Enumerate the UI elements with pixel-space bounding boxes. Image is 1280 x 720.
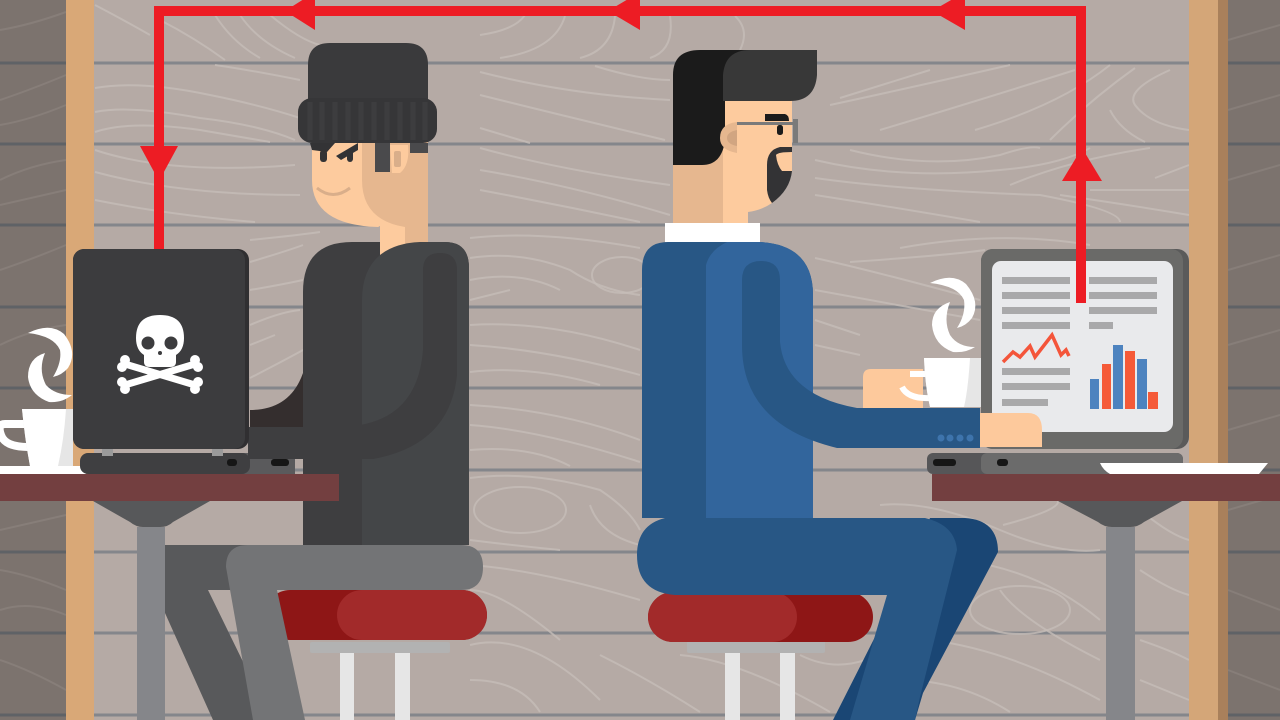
worker neck shade — [673, 150, 723, 223]
worker far leg — [833, 518, 998, 720]
hacker far leg — [165, 545, 300, 720]
hacker front torso — [362, 242, 469, 545]
left coffee cup — [0, 328, 86, 474]
worker collar — [665, 223, 760, 242]
worker beard — [767, 147, 792, 203]
right table — [932, 474, 1280, 720]
hacker smile — [317, 188, 350, 194]
right coffee cup — [863, 278, 981, 408]
left table leg — [93, 501, 210, 720]
bar chart — [1090, 345, 1158, 409]
hacker far arm — [250, 373, 303, 428]
red arrow loop from worker laptop to hacker laptop — [140, 0, 1102, 303]
arrowhead down — [140, 146, 178, 181]
cuff buttons — [938, 434, 974, 442]
hacker figure — [165, 43, 483, 720]
worker face — [723, 95, 792, 223]
steam — [930, 278, 975, 352]
hacker beanie — [298, 43, 437, 143]
steam — [28, 328, 72, 402]
arrowhead up — [1062, 148, 1102, 181]
hacker ear — [390, 145, 408, 173]
hacker brows and eyes — [310, 143, 358, 162]
worker right hand — [980, 413, 1042, 447]
saucer — [1100, 463, 1268, 474]
arrowheads left — [285, 0, 315, 30]
hacker laptop lid — [73, 249, 249, 456]
worker brow and eye — [765, 114, 789, 135]
worker ear — [720, 122, 737, 153]
hacker near leg — [226, 545, 483, 720]
screen text lines — [1002, 277, 1157, 406]
hacker jaw shade — [362, 140, 428, 227]
worker torso light — [706, 242, 813, 518]
worker stool — [648, 592, 873, 720]
worker figure — [637, 50, 998, 720]
hacker stool — [265, 590, 487, 720]
hacker arm — [360, 253, 457, 459]
left laptop base — [80, 453, 295, 474]
skull and crossbones icon — [117, 315, 203, 394]
worker hair — [673, 50, 760, 165]
worker thigh and shin — [637, 518, 957, 720]
hacker sideburn and back hair — [375, 143, 428, 172]
hacker face — [312, 140, 428, 227]
worker laptop — [927, 249, 1189, 474]
left table — [0, 474, 339, 501]
worker glasses — [737, 119, 798, 143]
worker torso — [642, 242, 813, 518]
line chart — [1003, 335, 1069, 362]
worker arm — [742, 261, 980, 448]
worker left hand — [863, 369, 923, 408]
hacker neck — [380, 222, 428, 262]
hacker torso — [303, 242, 469, 545]
